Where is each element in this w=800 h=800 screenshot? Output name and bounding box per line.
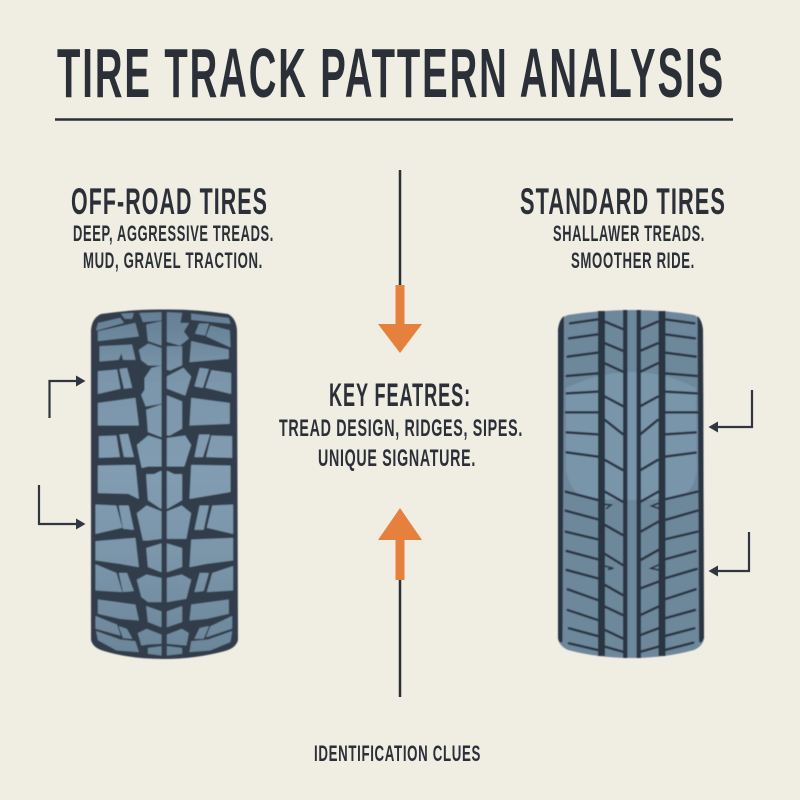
- heading: standard tires: SMOOTHER RIDE.: [571, 248, 695, 273]
- heading: off-road tires: MUD, GRAVEL TRACTION.: [83, 248, 263, 273]
- callout arrow: off-road lower: [39, 485, 86, 530]
- text: key features: [279, 377, 523, 472]
- arrow: bottom pointing up: [378, 508, 422, 697]
- footer label: IDENTIFICATION CLUES: [314, 741, 481, 766]
- text: key features: KEY FEATRES:: [329, 377, 471, 413]
- text: key features: TREAD DESIGN, RIDGES, SIPES.: [279, 415, 523, 442]
- heading: off-road tires: [71, 181, 274, 273]
- text: key features: UNIQUE SIGNATURE.: [318, 445, 476, 472]
- off-road tire: [91, 309, 238, 659]
- standard tire: [558, 310, 704, 658]
- callout arrow: standard lower: [708, 532, 749, 576]
- arrow: top pointing down: [378, 170, 422, 353]
- callout arrow: off-road upper: [50, 376, 86, 418]
- heading: standard tires: [520, 181, 726, 273]
- heading: off-road tires: OFF-ROAD TIRES: [71, 181, 268, 222]
- callout arrow: standard upper: [708, 390, 752, 432]
- heading: off-road tires: DEEP, AGGRESSIVE TREADS.: [73, 221, 274, 246]
